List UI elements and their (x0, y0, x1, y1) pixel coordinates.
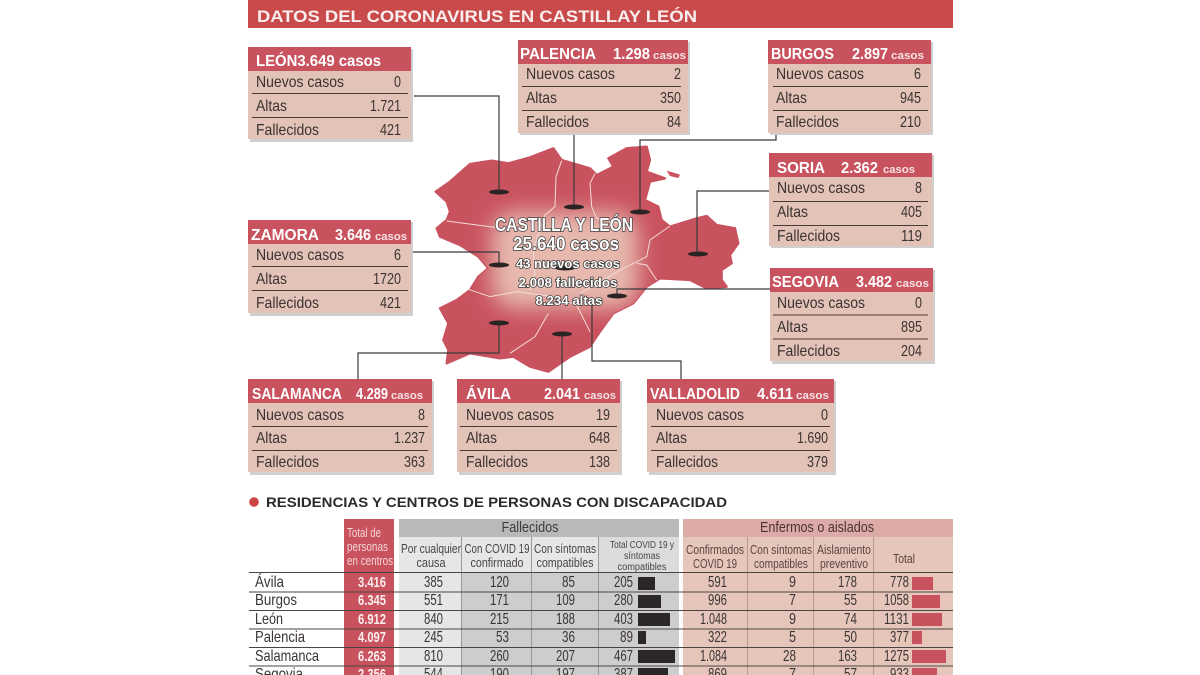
card: Salamanca: casos (391, 390, 423, 402)
card: Burgos: Fallecidos (776, 114, 839, 131)
row: Ávila: 385 (424, 574, 443, 591)
card: Salamanca: Nuevos casos (256, 407, 344, 424)
row: Ávila: 85 (562, 574, 575, 591)
card: Valladolid: Fallecidos (656, 454, 718, 471)
row: Palencia: 377 (890, 629, 909, 646)
card: Salamanca: 4.289 (356, 386, 388, 403)
card: Palencia (518, 40, 690, 135)
column: total de personas: en centros (347, 553, 393, 568)
card: Segovia: 895 (901, 319, 922, 336)
card: Ávila: ÁVILA (466, 384, 511, 403)
row: Salamanca: 163 (838, 648, 857, 665)
card: Burgos: 210 (900, 114, 921, 131)
card: Segovia (770, 268, 935, 364)
row: Salamanca: Salamanca (255, 648, 319, 665)
row: León: León (255, 611, 283, 628)
card: Zamora: casos (375, 231, 407, 243)
header: enfermos o aislados: Total (893, 551, 915, 566)
card: Segovia: SEGOVIA (772, 274, 839, 291)
card: Zamora: Fallecidos (256, 295, 319, 312)
header: enfermos o aislados: Confirmados (686, 542, 744, 557)
row: Palencia: 89 (620, 629, 633, 646)
card: Soria: Altas (777, 204, 808, 221)
column: total de personas: Total de (347, 525, 381, 540)
header: enfermos o aislados (683, 519, 953, 675)
column: total de personas: personas (347, 539, 388, 554)
row: Salamanca: 207 (556, 648, 575, 665)
map of Castilla y León (436, 147, 738, 372)
row: Salamanca: 28 (783, 648, 796, 665)
row: Palencia: Palencia (255, 629, 305, 646)
row: León: 215 (490, 611, 509, 628)
header: fallecidos: Con COVID 19 (464, 541, 530, 556)
card: Palencia: 84 (667, 114, 681, 131)
row: Palencia: 5 (789, 629, 796, 646)
card: León: 1.721 (370, 98, 401, 115)
card: Zamora: Altas (256, 271, 287, 288)
card: Ávila: Fallecidos (466, 454, 528, 471)
row: Salamanca (255, 648, 909, 665)
card: León (248, 47, 413, 142)
row: Ávila: 205 (614, 574, 633, 591)
row: León: 1131 (884, 611, 909, 628)
card: Valladolid: 4.611 (757, 386, 793, 403)
card: León: Nuevos casos (256, 74, 344, 91)
card: León: 0 (394, 74, 401, 91)
table: residencias (249, 519, 953, 675)
row: Ávila: 178 (838, 574, 857, 591)
row: León: 188 (556, 611, 575, 628)
card: Salamanca: Fallecidos (256, 454, 319, 471)
card: Segovia: 204 (901, 343, 922, 360)
map centre text: regional totals: 2.008 fallecidos (518, 275, 618, 290)
card: Burgos: casos (891, 50, 924, 62)
map centre text: regional totals: CASTILLA Y LEÓN (495, 214, 633, 235)
card: Valladolid: 379 (807, 454, 828, 471)
card: Salamanca: 1.237 (394, 430, 425, 447)
header: fallecidos: compatibles (536, 555, 594, 570)
row: Burgos: 109 (556, 592, 575, 609)
row: León (255, 611, 909, 628)
row: Palencia (255, 629, 909, 646)
header: fallecidos (399, 519, 679, 675)
card: Valladolid (647, 379, 836, 475)
row: Salamanca: 260 (490, 648, 509, 665)
title banner (248, 0, 953, 28)
map centre text: regional totals: 43 nuevos casos (516, 256, 620, 271)
card: León: Fallecidos (256, 122, 319, 139)
card: Soria (769, 153, 934, 248)
row: Ávila: 591 (708, 574, 727, 591)
card: Valladolid: Nuevos casos (656, 407, 744, 424)
row: León: 9 (789, 611, 796, 628)
row: Ávila: 120 (490, 574, 509, 591)
row: Burgos: 55 (844, 592, 857, 609)
row: León: 1.048 (700, 611, 727, 628)
card: Soria: 119 (901, 228, 922, 245)
title banner: DATOS DEL CORONAVIRUS EN CASTILLAY LEÓN (257, 7, 697, 26)
card: Burgos: BURGOS (771, 46, 834, 63)
row rules (249, 572, 953, 666)
card: Soria: 405 (901, 204, 922, 221)
card: Burgos (768, 40, 933, 135)
card: Palencia: 1.298 (613, 46, 650, 63)
card: Soria: Nuevos casos (777, 180, 865, 197)
card: Segovia: Nuevos casos (777, 295, 865, 312)
card: Burgos: 945 (900, 90, 921, 107)
row: León: 74 (844, 611, 857, 628)
card: Segovia: 0 (915, 295, 922, 312)
map centre text: regional totals (495, 214, 633, 308)
card: Soria: 8 (915, 180, 922, 197)
row: Palencia: 36 (562, 629, 575, 646)
card: Zamora: 6 (394, 247, 401, 264)
card: Burgos: 2.897 (852, 46, 888, 63)
card: Palencia: casos (653, 50, 686, 62)
column: total de personas (344, 519, 394, 675)
card: Salamanca: 363 (404, 454, 425, 471)
section heading: residencias: RESIDENCIAS Y CENTROS DE PERSONAS CON DISCAPACIDAD (266, 494, 727, 510)
card: Soria: 2.362 (841, 160, 878, 177)
map marker: hidden (555, 266, 575, 270)
card: Segovia: Altas (777, 319, 808, 336)
row: Burgos: 1058 (884, 592, 909, 609)
row: Ávila: 778 (890, 574, 909, 591)
row: Palencia: 245 (424, 629, 443, 646)
row: León: 840 (424, 611, 443, 628)
row: Burgos: 996 (708, 592, 727, 609)
card: Burgos: Altas (776, 90, 807, 107)
card: Segovia: Fallecidos (777, 343, 840, 360)
card: Soria: Fallecidos (777, 228, 840, 245)
card: Salamanca: Altas (256, 430, 287, 447)
card: Valladolid: 1.690 (797, 430, 828, 447)
card: Ávila: Nuevos casos (466, 407, 554, 424)
card: Salamanca: 8 (418, 407, 425, 424)
header: fallecidos: Por cualquier (401, 541, 462, 556)
card: Zamora: 421 (380, 295, 401, 312)
card: León: 421 (380, 122, 401, 139)
card: Salamanca (248, 379, 434, 475)
row: Burgos: 280 (614, 592, 633, 609)
card: Valladolid: Altas (656, 430, 687, 447)
card: Ávila: Altas (466, 430, 497, 447)
card: León: LEÓN3.649 casos (256, 51, 381, 70)
card: Salamanca: SALAMANCA (252, 386, 342, 403)
row: Burgos (255, 592, 909, 609)
header: fallecidos: Con síntomas (534, 541, 596, 556)
card: León: Altas (256, 98, 287, 115)
row: Burgos: Burgos (255, 592, 297, 609)
row: Ávila: Ávila (255, 572, 284, 591)
map centre text: regional totals: 25.640 casos (513, 234, 619, 254)
card: Palencia: PALENCIA (520, 46, 596, 63)
card: Ávila: 19 (596, 407, 610, 424)
row: Palencia: 50 (844, 629, 857, 646)
card: Valladolid: VALLADOLID (650, 386, 740, 403)
card: Segovia: casos (896, 278, 929, 290)
card: Soria: SORIA (777, 160, 825, 177)
card: Palencia: Nuevos casos (526, 66, 615, 83)
card: Soria: casos (883, 164, 915, 176)
header: enfermos o aislados: Con síntomas (750, 542, 812, 557)
card: Palencia: Fallecidos (526, 114, 589, 131)
row: Salamanca: 1275 (884, 648, 909, 665)
row: Palencia: 53 (496, 629, 509, 646)
card: Ávila: casos (584, 390, 616, 402)
row: Ávila: 9 (789, 574, 796, 591)
card: Burgos: 6 (914, 66, 921, 83)
row: Burgos: 171 (490, 592, 509, 609)
row: Palencia: 322 (708, 629, 727, 646)
row: León: 403 (614, 611, 633, 628)
bars: total enfermos (912, 577, 946, 675)
map centre text: regional totals: 8.234 altas (536, 293, 602, 308)
card: Zamora: 1720 (373, 271, 401, 288)
header: enfermos o aislados: preventivo (820, 556, 868, 571)
row: Burgos: 6.345 (358, 592, 386, 609)
card: Valladolid: casos (796, 390, 829, 402)
card: Ávila: 138 (589, 454, 610, 471)
row: Ávila: 3.416 (358, 574, 386, 591)
row: Salamanca: 467 (614, 648, 633, 665)
card: Zamora: 3.646 (335, 227, 371, 244)
connector lines and markers (358, 96, 776, 379)
row: Salamanca: 6.263 (358, 648, 386, 665)
row: Burgos: 551 (424, 592, 443, 609)
header: fallecidos: Fallecidos (502, 519, 558, 536)
header: enfermos o aislados: compatibles (754, 556, 808, 571)
header: fallecidos: confirmado (470, 555, 524, 570)
card: Ávila: 648 (589, 430, 610, 447)
header: fallecidos: síntomas (624, 551, 660, 562)
card: Zamora: ZAMORA (251, 227, 319, 244)
card: Palencia: 2 (674, 66, 681, 83)
card: Zamora (248, 220, 413, 316)
card: Segovia: 3.482 (856, 274, 892, 291)
row: Burgos: 7 (789, 592, 796, 609)
card: Palencia: Altas (526, 90, 557, 107)
header: enfermos o aislados: COVID 19 (693, 556, 737, 571)
header: enfermos o aislados: Enfermos o aislados (760, 519, 874, 536)
row: Salamanca: 810 (424, 648, 443, 665)
card: Ávila: 2.041 (544, 386, 580, 403)
card: Burgos: Nuevos casos (776, 66, 864, 83)
row: León: 6.912 (358, 611, 386, 628)
card: Valladolid: 0 (821, 407, 828, 424)
card: Zamora: Nuevos casos (256, 247, 344, 264)
row: Salamanca: 1.084 (700, 648, 727, 665)
row: Ávila (255, 572, 909, 591)
header: enfermos o aislados: Aislamiento (817, 542, 871, 557)
row: Palencia: 4.097 (358, 629, 386, 646)
row: Segovia (255, 666, 909, 675)
bars: total covid fallecidos (638, 577, 675, 675)
header: fallecidos: Total COVID 19 y (610, 540, 674, 551)
header: fallecidos: causa (416, 555, 446, 570)
header: fallecidos: compatibles (618, 562, 666, 573)
card: Ávila (457, 379, 622, 475)
card: Palencia: 350 (660, 90, 681, 107)
